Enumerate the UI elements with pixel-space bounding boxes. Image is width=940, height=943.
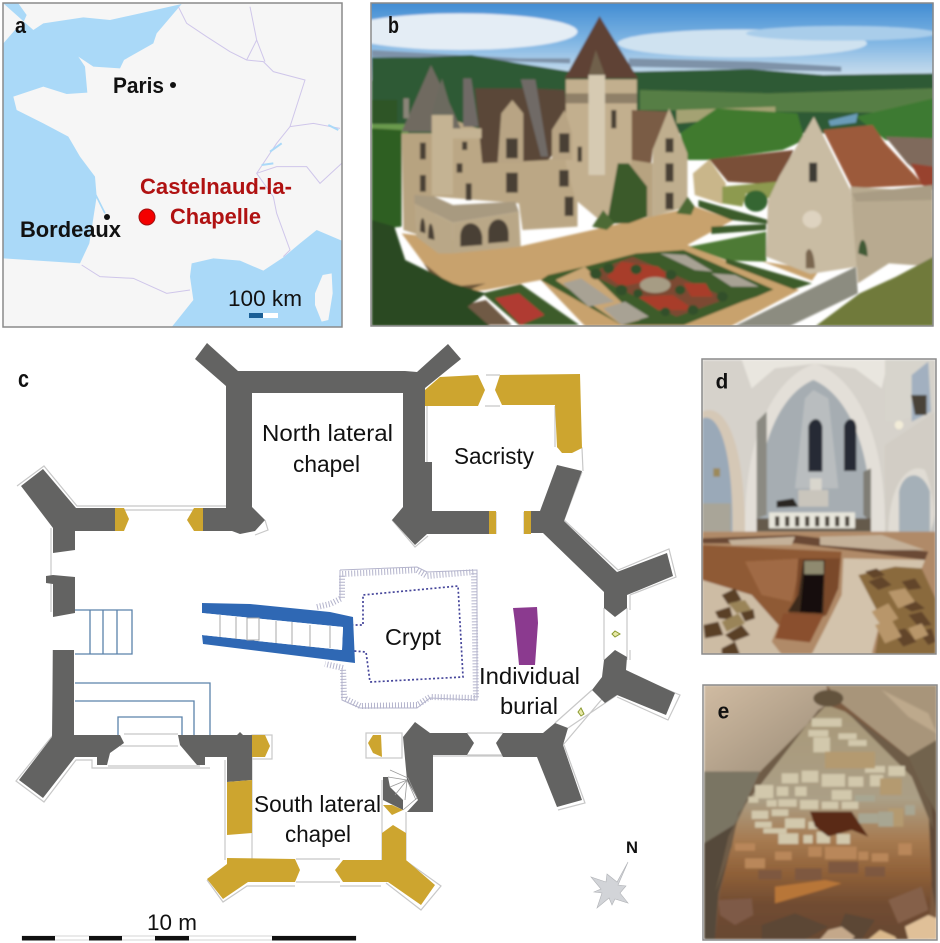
scale bar: 10 m [22,910,356,940]
map marker: Bordeaux [104,214,110,220]
panel b border [371,3,933,326]
plan: crypt hatched outline [317,567,477,708]
plan: crypt dotted outline [343,586,463,682]
panel d label: d [716,370,728,393]
plan: ochre walls (later fabric) [115,374,582,905]
panel e label: e [718,698,729,723]
plan: blue stairs and steps [75,610,210,735]
panel d border [702,359,936,654]
label: North lateral chapel: chapel [293,451,360,477]
label: South lateral chapel: South lateral [254,791,381,817]
plan: individual burial in purple [513,607,538,665]
plan: spiral staircase lines [388,770,417,810]
plan: thin outer outlines [16,375,680,910]
label: Crypt: Crypt [385,624,442,650]
map label: Bordeaux: Bordeaux [20,217,122,242]
panel e border [703,685,937,940]
north arrow: N [626,838,638,857]
panel c label: c [18,366,29,393]
panel c: floor plan of the chapel [16,343,680,940]
scale bar: 10 m: 10 m [147,910,197,935]
plan: grey walls (medieval fabric) [19,343,675,812]
map label: a: a [15,13,27,38]
panel b: photo of chateau and chapel [343,0,937,326]
map marker: Castelnaud-la-Chapelle [139,209,155,225]
label: North lateral chapel: North lateral [262,420,393,446]
map label: Castelnaud-la-Chapelle: Chapelle [170,204,261,229]
panel d: photo of chapel interior with excavated floor [702,360,936,654]
panel e: photo of crypt stone wall [704,685,937,939]
panel a border [3,3,342,327]
map scale: 100 km: 100 km [228,286,302,311]
label: Individual burial: burial [500,693,558,719]
map label: Castelnaud-la-Chapelle: Castelnaud-la- [140,174,292,199]
panel a: location map of France [3,3,342,328]
map marker: Paris [170,82,176,88]
label: Sacristy: Sacristy [454,443,534,469]
label: South lateral chapel: chapel [285,821,351,847]
map label: Paris: Paris [113,73,164,98]
plan: blue collective tomb [202,603,355,663]
panel b label: b [388,12,399,38]
plan: door markers [578,631,620,716]
north arrow [591,838,638,908]
label: Individual burial: Individual [479,663,580,689]
map: sea and coastlines [3,3,342,328]
map scale: 100 km [230,290,301,318]
